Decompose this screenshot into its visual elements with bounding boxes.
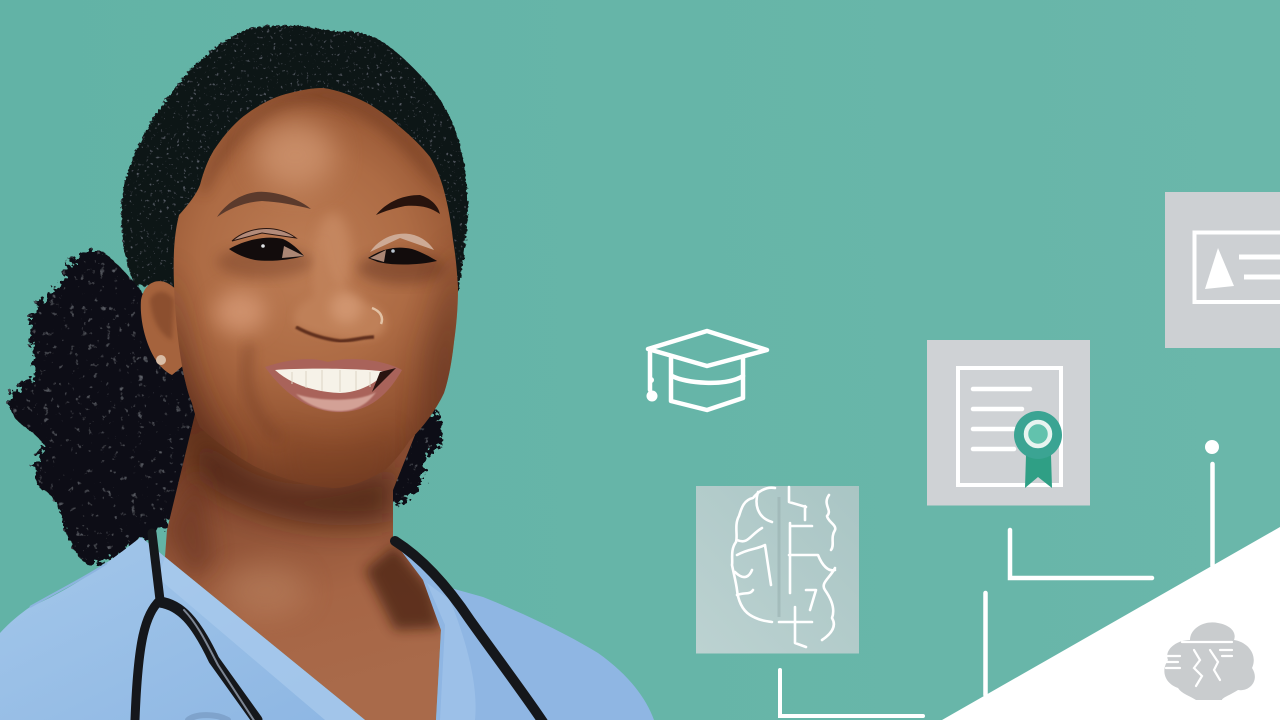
nurse portrait <box>0 25 654 720</box>
panel: license card <box>1165 192 1280 348</box>
icon: award ribbon seal <box>1014 411 1062 488</box>
panel: brain card <box>696 486 859 654</box>
neck <box>165 410 441 720</box>
connector: vertical line <box>983 593 988 695</box>
icon: circuit brain <box>732 487 835 647</box>
eyebrows <box>217 192 440 217</box>
white diagonal corner panel <box>942 527 1280 720</box>
connector: certificate to path <box>1010 530 1152 578</box>
icon: ID document <box>1194 232 1280 302</box>
ear and earring <box>141 281 190 375</box>
eyes <box>229 229 437 265</box>
nose <box>294 240 386 341</box>
smile <box>265 359 402 412</box>
icon: certificate paper <box>958 368 1061 485</box>
afro hair behind head <box>10 250 442 564</box>
top hair <box>122 25 468 300</box>
icon: graduation cap <box>646 331 767 410</box>
icon: grey tree <box>1164 622 1255 700</box>
scrub top <box>0 537 654 720</box>
stethoscope <box>135 533 543 720</box>
face shading <box>174 88 458 455</box>
face <box>174 88 458 488</box>
neck shading <box>166 425 441 630</box>
connector: brain to path <box>780 670 923 716</box>
panel: certificate card <box>927 340 1090 506</box>
connector: dot and vertical line <box>1205 440 1219 566</box>
